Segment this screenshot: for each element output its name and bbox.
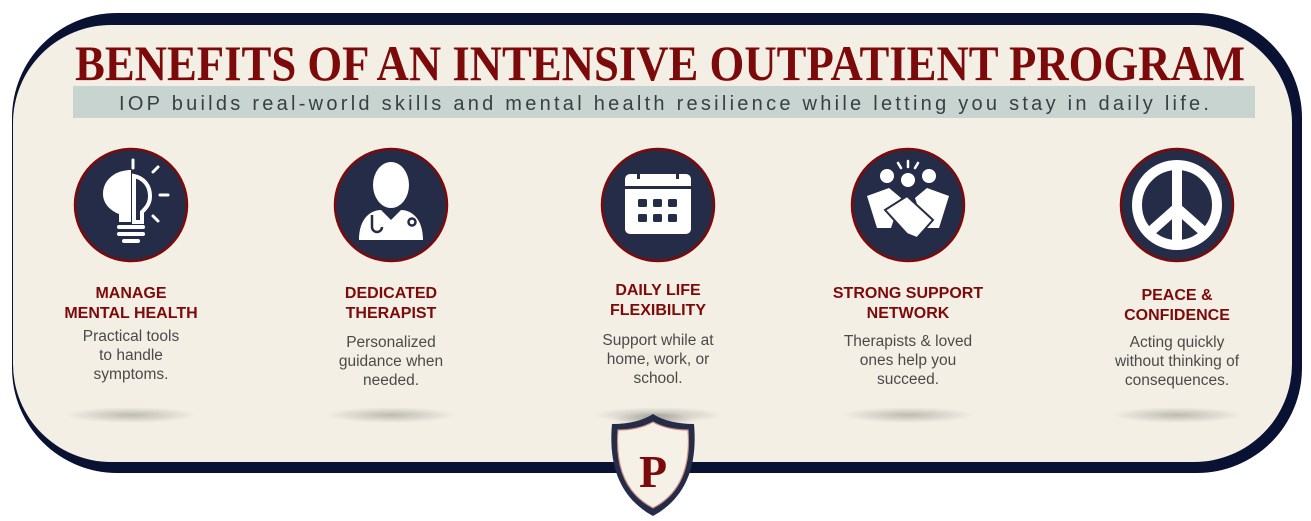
heading: MANAGE	[95, 285, 167, 302]
icon: handshake group	[852, 149, 964, 261]
panel: manage mental health: to handle	[99, 347, 163, 364]
heading: PEACE &	[1141, 287, 1213, 304]
icon: calendar	[602, 149, 714, 261]
description: Support while at	[602, 332, 714, 349]
panel: manage mental health: symptoms.	[94, 366, 168, 383]
panel: peace and confidence: without thinking of	[1114, 353, 1240, 370]
panel: manage mental health	[64, 149, 198, 423]
panel: daily life flexibility: school.	[633, 370, 683, 387]
panel: daily life flexibility: home, work, or	[607, 351, 709, 368]
icon: brain bulb	[75, 149, 187, 261]
heading: DEDICATED	[345, 285, 437, 302]
panel: strong support network	[833, 149, 983, 423]
panel: daily life flexibility: FLEXIBILITY	[610, 302, 706, 319]
panel: manage mental health: MENTAL HEALTH	[64, 305, 198, 322]
panel: dedicated therapist: guidance when	[339, 353, 443, 370]
panel: dedicated therapist: needed.	[363, 372, 419, 389]
icon: peace sign	[1121, 149, 1233, 261]
heading: DAILY LIFE	[615, 282, 701, 299]
panel: dedicated therapist: THERAPIST	[346, 305, 437, 322]
panel: strong support network: ones help you	[860, 352, 956, 369]
panel: daily life flexibility	[593, 149, 723, 423]
description: Acting quickly	[1130, 334, 1225, 351]
panel: strong support network: NETWORK	[867, 305, 950, 322]
description: Personalized	[346, 334, 436, 351]
heading: STRONG SUPPORT	[833, 285, 983, 302]
subtitle band: IOP builds real-world skills and mental health resilience while letting you stay in daily life.	[119, 93, 1209, 115]
description: Therapists & loved	[844, 333, 972, 350]
panel: peace and confidence: consequences.	[1125, 372, 1229, 389]
panel: strong support network: succeed.	[877, 371, 939, 388]
panel: peace and confidence: CONFIDENCE	[1124, 307, 1230, 324]
shield logo: P	[639, 446, 667, 497]
panel: peace and confidence	[1112, 149, 1242, 423]
description: Practical tools	[83, 328, 179, 345]
subtitle band	[73, 86, 1255, 118]
icon: doctor	[335, 149, 447, 261]
panel: dedicated therapist	[326, 149, 456, 423]
shield logo	[611, 412, 695, 516]
